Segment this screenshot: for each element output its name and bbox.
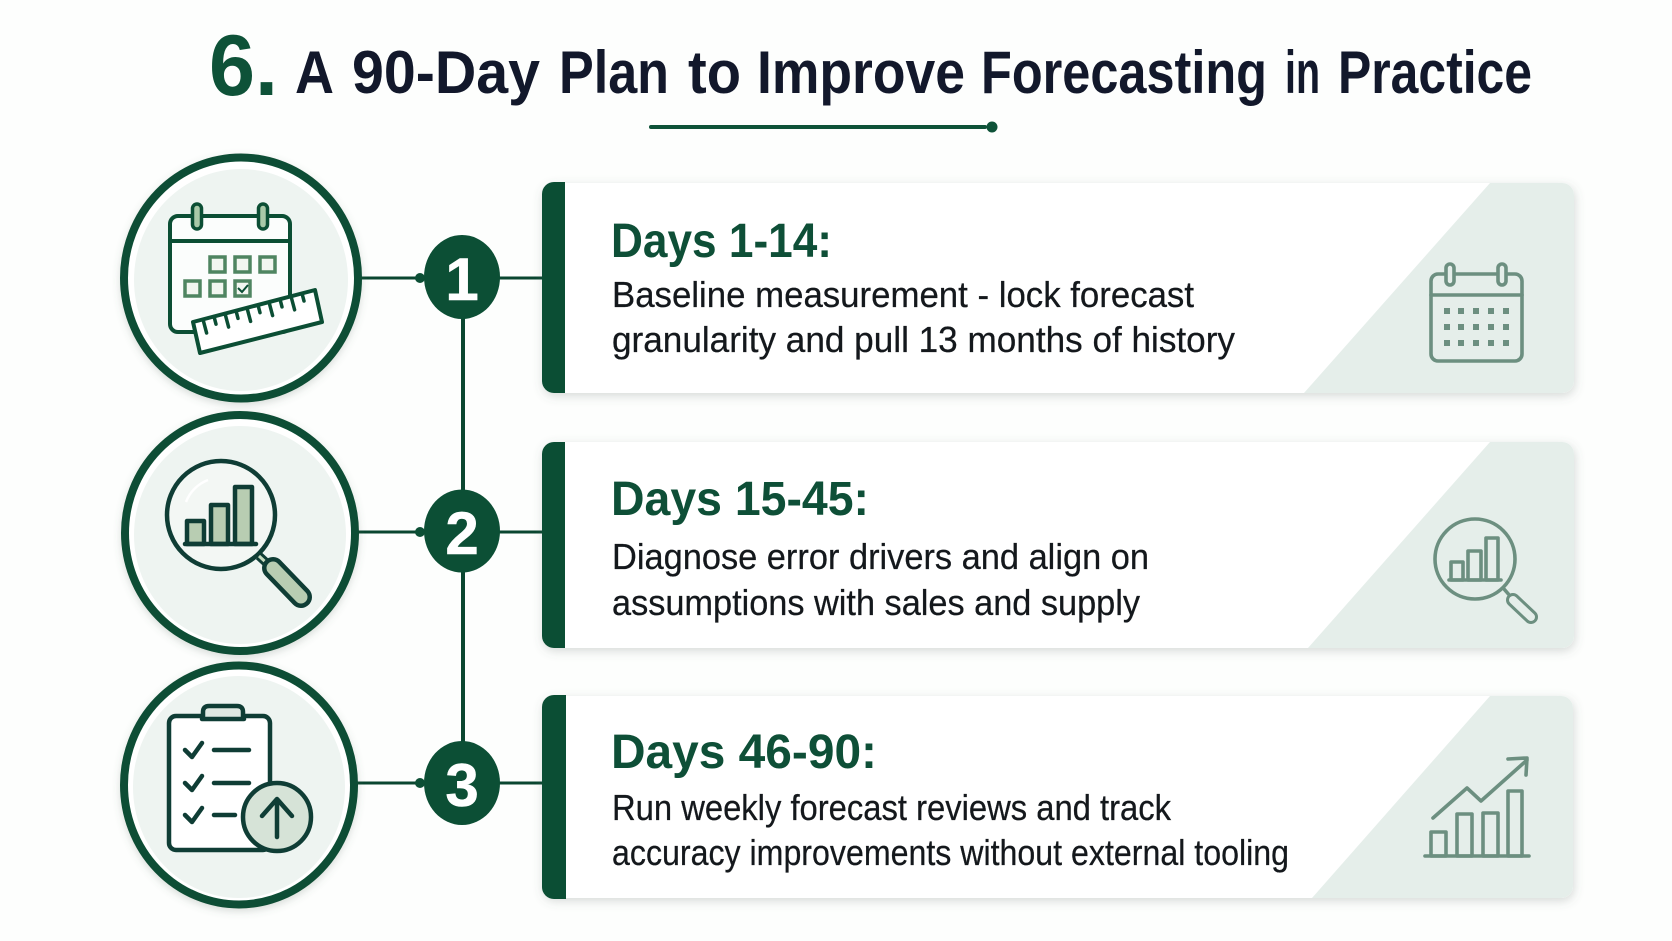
step node 1: 1 — [445, 246, 479, 313]
title: to — [688, 39, 741, 106]
description: assumptions with sales and supply — [612, 582, 1140, 623]
step node 2: 2 — [445, 500, 479, 567]
description: Run weekly forecast reviews and track — [612, 787, 1172, 828]
title: Forecasting — [981, 39, 1267, 106]
step node 2 — [415, 490, 500, 572]
title: Improve — [757, 39, 965, 106]
circle icon: calendar with ruler — [124, 158, 358, 398]
step node 3 — [415, 741, 500, 825]
icon: magnifier — [1435, 519, 1531, 617]
title: Plan — [559, 39, 669, 106]
description: Diagnose error drivers and align on — [612, 536, 1149, 577]
title: 90-Day — [352, 39, 541, 106]
heading: Days 15-45: — [611, 473, 869, 526]
heading: Days 1-14: — [611, 215, 832, 268]
panel: days 46-90 — [542, 695, 1573, 899]
step node 3: 3 — [445, 752, 479, 819]
title: in — [1285, 39, 1320, 106]
icon: growth chart — [1425, 758, 1529, 856]
description — [612, 787, 1289, 873]
description: accuracy improvements without external tooling — [612, 832, 1289, 873]
description: Baseline measurement - lock forecast — [612, 274, 1194, 315]
title — [209, 18, 1532, 114]
step node 1 — [415, 235, 500, 319]
description: granularity and pull 13 months of history — [612, 319, 1235, 360]
panel: days 1-14 — [542, 182, 1574, 393]
circle icon: magnifier with bar chart — [125, 415, 355, 651]
title: 6. — [209, 18, 278, 114]
circle icon: checklist with up arrow — [124, 666, 354, 904]
description — [612, 536, 1149, 623]
panel: days 15-45 — [542, 442, 1574, 648]
icon: calendar — [1431, 264, 1522, 361]
title: A — [295, 39, 334, 106]
timeline connectors — [356, 278, 544, 783]
title: Practice — [1338, 39, 1532, 106]
title underline — [651, 122, 998, 132]
heading: Days 46-90: — [611, 726, 877, 779]
description — [612, 274, 1235, 360]
